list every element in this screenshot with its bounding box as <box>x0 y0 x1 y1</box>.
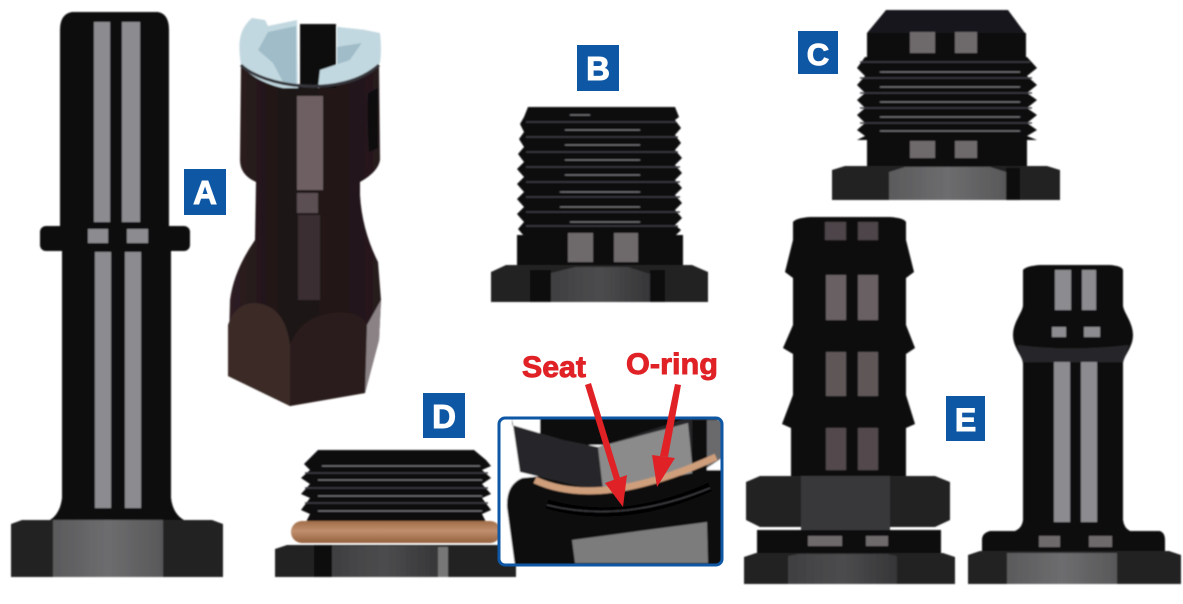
badge E: E <box>955 402 976 438</box>
fitting A: female quick-connect socket with blue retainer <box>228 18 381 406</box>
fitting A: straight quick-connect tube <box>11 12 223 577</box>
badge D: D <box>432 398 456 435</box>
label: Seat: Seat <box>522 351 586 384</box>
label: O-ring: O-ring <box>626 348 718 381</box>
badge D <box>423 393 465 438</box>
badge C <box>798 31 838 74</box>
badge A <box>184 169 226 215</box>
fitting E: beaded hose fitting <box>968 265 1181 584</box>
badge B <box>577 45 619 91</box>
badge C: C <box>807 37 829 72</box>
arrow: Seat <box>585 383 627 507</box>
badge E <box>946 396 985 441</box>
fitting D: O-ring boss port <box>275 450 516 577</box>
arrow: O-ring <box>652 384 681 487</box>
fitting C: AN flare thread <box>832 10 1060 200</box>
fitting E: barbed hose fitting with swivel nut <box>744 217 955 584</box>
badge B: B <box>586 50 610 87</box>
inset: seat and O-ring close-up <box>499 418 722 566</box>
fitting B: tapered pipe thread <box>491 107 708 302</box>
badge A: A <box>193 174 217 211</box>
